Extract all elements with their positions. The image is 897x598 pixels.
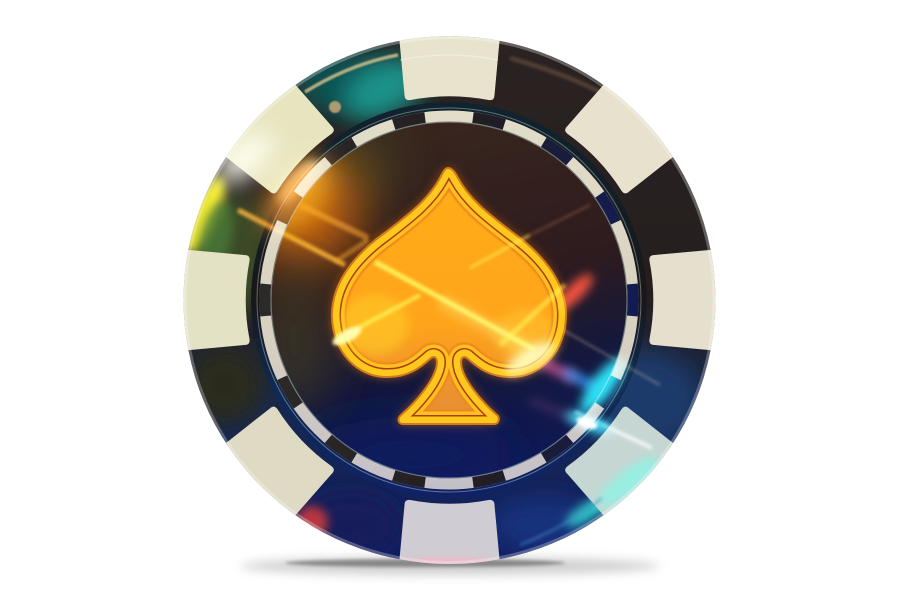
flare: pink and blue streaks lower right bbox=[530, 330, 660, 448]
flare: orange streaks left bbox=[238, 146, 368, 265]
glow behind spade bbox=[332, 168, 566, 424]
flare: streak across spade bbox=[330, 205, 598, 380]
dashed ring bbox=[265, 116, 633, 484]
icon: golden spade bbox=[332, 168, 566, 424]
lens flares bbox=[238, 146, 660, 448]
inner groove bbox=[251, 102, 647, 498]
ground shadow bbox=[240, 557, 660, 575]
colour glow: dark edge segments bbox=[177, 46, 700, 557]
white edge wedges bbox=[180, 30, 720, 570]
illustration: poker chip bbox=[184, 36, 716, 580]
highlight: yellow sheen on spade bbox=[341, 295, 555, 361]
thin ring line bbox=[257, 108, 641, 492]
centre disc bbox=[270, 122, 628, 478]
wedge lighting bbox=[185, 38, 714, 565]
chip body bbox=[177, 30, 720, 570]
